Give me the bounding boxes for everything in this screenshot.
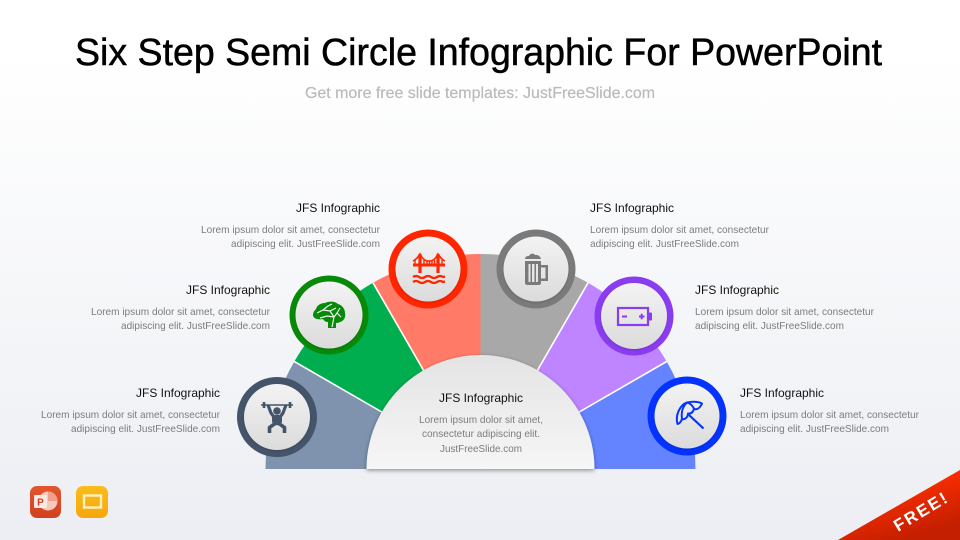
icon: bridge badge xyxy=(388,230,468,308)
icon: beach umbrella badge xyxy=(648,376,726,456)
text: step 6 right xyxy=(740,386,919,435)
badge: free ribbon xyxy=(838,470,960,540)
icon: PowerPoint logo xyxy=(30,486,61,518)
subtitle: Get more free slide templates: JustFreeSlide.com xyxy=(305,85,655,102)
segment: slate xyxy=(266,362,480,469)
segment: blue xyxy=(480,362,696,469)
icon: beer mug badge xyxy=(496,230,576,308)
icon: brain badge xyxy=(290,276,368,354)
text: step 6 right: JFS Infographic xyxy=(740,386,824,400)
center semicircle xyxy=(366,355,594,469)
text: step 1 left: adipiscing elit. JustFreeSlide.com xyxy=(71,423,220,435)
text: step 2 left: Lorem ipsum dolor sit amet, consectetur xyxy=(91,306,270,318)
segment: purple xyxy=(480,283,667,469)
text: step 4 right xyxy=(590,201,769,250)
center text: JFS Infographic xyxy=(439,391,523,405)
text: step 5 right: JFS Infographic xyxy=(695,283,779,297)
center text: Lorem ipsum dolor sit amet, xyxy=(419,414,543,426)
segment: red xyxy=(373,254,480,469)
semi circle chart xyxy=(266,254,696,469)
icon: weightlifter badge xyxy=(237,377,317,457)
title: Six Step Semi Circle Infographic For PowerPoint xyxy=(75,32,882,74)
text: step 3 left: adipiscing elit. JustFreeSlide.com xyxy=(231,238,380,250)
text: step 4 right: Lorem ipsum dolor sit amet, consectetur xyxy=(590,224,769,236)
text: step 1 left: Lorem ipsum dolor sit amet, consectetur xyxy=(41,409,220,421)
text: step 3 left: Lorem ipsum dolor sit amet, consectetur xyxy=(201,224,380,236)
center text: JustFreeSlide.com xyxy=(440,443,522,455)
center text: consectetur adipiscing elit. xyxy=(422,428,540,440)
center text xyxy=(419,391,543,455)
text: step 1 left xyxy=(41,386,220,435)
text: step 3 left xyxy=(201,201,380,250)
segment: green xyxy=(294,283,480,469)
text: step 1 left: JFS Infographic xyxy=(136,386,220,400)
icon: PowerPoint logo: P xyxy=(37,498,44,508)
text: step 5 right: adipiscing elit. JustFreeSlide.com xyxy=(695,320,844,332)
text: step 6 right: adipiscing elit. JustFreeSlide.com xyxy=(740,423,889,435)
text: step 4 right: adipiscing elit. JustFreeSlide.com xyxy=(590,238,739,250)
segment: grey xyxy=(480,254,588,469)
text: step 5 right: Lorem ipsum dolor sit amet, consectetur xyxy=(695,306,874,318)
text: step 2 left: JFS Infographic xyxy=(186,283,270,297)
icon: Google Slides logo xyxy=(76,486,108,518)
text: step 5 right xyxy=(695,283,874,332)
text: step 2 left: adipiscing elit. JustFreeSlide.com xyxy=(121,320,270,332)
text: step 3 left: JFS Infographic xyxy=(296,201,380,215)
icon: battery badge xyxy=(594,276,674,356)
text: step 6 right: Lorem ipsum dolor sit amet, consectetur xyxy=(740,409,919,421)
badge: free ribbon: FREE! xyxy=(890,488,952,535)
text: step 4 right: JFS Infographic xyxy=(590,201,674,215)
text: step 2 left xyxy=(91,283,270,332)
